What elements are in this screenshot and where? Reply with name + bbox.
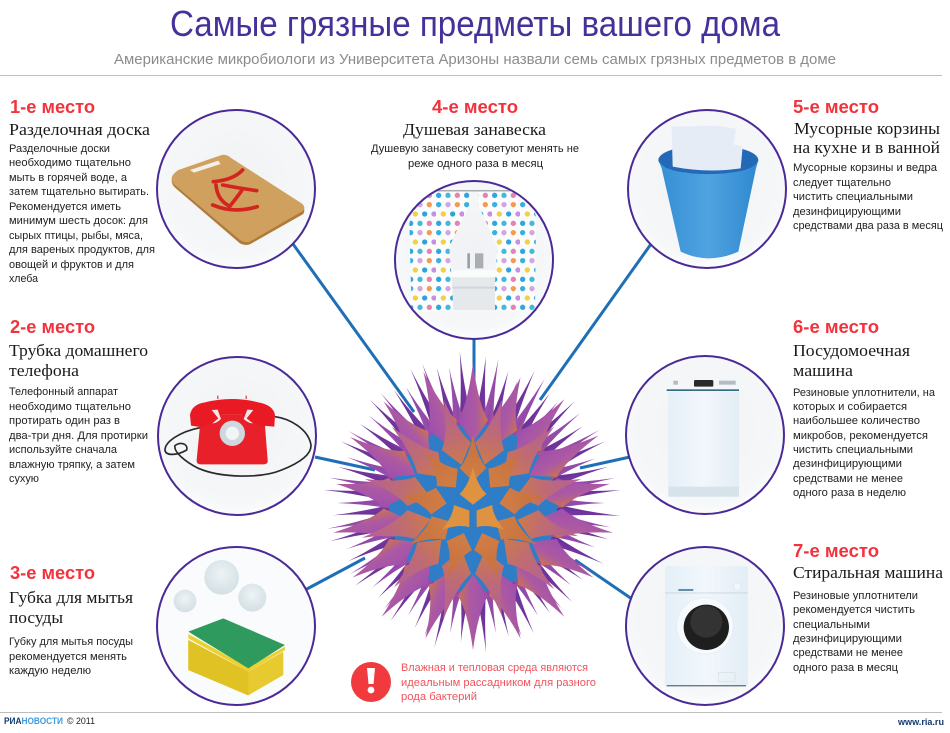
central bacterium (323, 351, 621, 653)
text: dishwasher (793, 387, 936, 499)
heading: phone (9, 341, 148, 380)
text: cutting board: минимум шесть досок: для (9, 215, 148, 227)
heading: dishwasher: Посудомоечная (793, 341, 910, 360)
text: trash bins: средствами два раза в месяц (793, 220, 944, 232)
rank 4: 4-е место (432, 96, 518, 117)
text: shower curtain (371, 143, 579, 170)
text: cutting board (9, 143, 155, 285)
text: shower curtain: Душевую занавеску советуют менять не (371, 143, 579, 155)
callout (351, 662, 596, 703)
text: cutting board: для вареных продуктов, для (9, 244, 155, 256)
callout text: идеальным рассадником для разного (401, 677, 596, 689)
text: washing machine: Резиновые уплотнители (793, 590, 918, 602)
text: phone: сухую (9, 473, 39, 485)
subtitle: Американские микробиологи из Университета Аризоны назвали семь самых грязных предметов в доме (114, 51, 836, 68)
inner spikes group (331, 363, 615, 650)
text: cutting board: затем тщательно вытирать. (9, 186, 149, 198)
text: sponge: Губку для мытья посуды (9, 636, 133, 648)
text: cutting board: необходимо тщательно (9, 157, 131, 169)
circle outline 2 (158, 357, 316, 515)
panel: item 7 (626, 540, 944, 705)
heading: trash bins: Мусорные корзины (794, 119, 940, 138)
icon: cutting board circle (158, 111, 314, 267)
text: trash bins (793, 162, 944, 232)
heading: phone: Трубка домашнего (9, 341, 148, 360)
spike ring middle (358, 396, 585, 623)
header rule (0, 75, 942, 76)
text: trash bins: чистить специальными (793, 191, 913, 203)
rank 3: 3-е место (10, 562, 95, 583)
circle outline 6 (626, 356, 784, 514)
title: Самые грязные предметы вашего дома (170, 3, 781, 44)
text: cutting board: мыть в горячей воде, а (9, 172, 128, 184)
text: washing machine (793, 590, 918, 674)
heading: washing machine: Стиральная машина (793, 563, 944, 582)
heading: trash bins (793, 119, 940, 157)
text: dishwasher: одного раза в неделю (793, 487, 906, 499)
text: cutting board: сырых птицы, рыбы, мяса, (9, 230, 143, 242)
text: cutting board: хлеба (9, 273, 39, 285)
text: dishwasher: Резиновые уплотнители, на (793, 387, 936, 399)
panel: item 1 (9, 96, 315, 285)
panel: item 3 (9, 547, 315, 705)
rank 5: 5-е место (793, 96, 879, 117)
text: trash bins: следует тщательно (793, 177, 891, 189)
circle outline 3 (157, 547, 315, 705)
text: cutting board: Рекомендуется иметь (9, 201, 121, 213)
text: sponge (9, 636, 133, 677)
icon: dishwasher (627, 357, 783, 513)
spike ring inner (399, 435, 547, 581)
panel: item 6 (626, 316, 936, 514)
heading: sponge: посуды (9, 608, 63, 627)
icon: red telephone (159, 358, 315, 514)
text: phone: Телефонный аппарат (9, 386, 118, 398)
back spikes dark (323, 351, 621, 653)
text: phone: два-три дня. Для протирки (9, 430, 148, 442)
text: washing machine: одного раза в месяц (793, 662, 899, 674)
callout text (401, 662, 596, 703)
text: phone (9, 386, 148, 485)
mid spikes purple (325, 357, 617, 643)
text: washing machine: дезинфицирующими (793, 633, 902, 645)
heading: sponge (9, 588, 133, 627)
rank 7: 7-е место (793, 540, 879, 561)
heading: dishwasher (793, 341, 910, 380)
heading: shower curtain: Душевая занавеска (403, 120, 547, 139)
text: dishwasher: дезинфицирующими (793, 458, 902, 470)
callout text: рода бактерий (401, 691, 477, 703)
blue body (389, 424, 557, 592)
text: phone: используйте сначала (9, 444, 118, 456)
text: phone: влажную тряпку, а затем (9, 459, 135, 471)
text: dishwasher: наибольшее количество (793, 415, 920, 427)
callout text: Влажная и тепловая среда являются (401, 662, 588, 674)
spike ring outer (331, 363, 615, 650)
circle outline 1 (157, 110, 315, 268)
text: washing machine: средствами не менее (793, 647, 903, 659)
circle outline 5 (628, 110, 786, 268)
text: dishwasher: которых и собирается (793, 401, 907, 413)
heading: sponge: Губка для мытья (9, 588, 133, 607)
text: shower curtain: реже одного раза в месяц (408, 158, 544, 170)
heading: cutting board: Разделочная доска (9, 120, 151, 139)
text: cutting board: Разделочные доски (9, 143, 110, 155)
text: phone: необходимо тщательно (9, 401, 131, 413)
rank 2: 2-е место (10, 316, 95, 337)
text: cutting board: овощей и фруктов и для (9, 259, 134, 271)
text: phone: протирать один раз в (9, 415, 120, 427)
circle outline 7 (626, 547, 784, 705)
text: trash bins: дезинфицирующими (793, 206, 901, 218)
heading: phone: телефона (9, 361, 80, 380)
heading: dishwasher: машина (793, 361, 854, 380)
heading: trash bins: на кухне и в ванной (793, 138, 940, 157)
icon: blue bin (629, 111, 785, 267)
panel: item 5 (628, 96, 944, 268)
icon: exclamation (351, 662, 391, 702)
text: washing machine: специальными (793, 619, 870, 631)
footer rule (0, 712, 942, 713)
rank 6: 6-е место (793, 316, 879, 337)
connector lines (293, 244, 651, 599)
text: dishwasher: средствами не менее (793, 473, 903, 485)
spike centre (434, 467, 512, 541)
icon: shower curtain (396, 182, 552, 338)
icon: sponge with bubbles (158, 548, 314, 704)
icon: washing machine (627, 548, 783, 704)
panel: item 2 (9, 316, 316, 515)
footer logo: РИАНОВОСТИ (4, 716, 63, 726)
footer url: www.ria.ru (897, 717, 944, 727)
text: trash bins: Мусорные корзины и ведра (793, 162, 938, 174)
text: washing machine: рекомендуется чистить (793, 604, 915, 616)
text: sponge: каждую неделю (9, 665, 91, 677)
panel: item 4 (371, 96, 579, 339)
footer copyright: © 2011 (67, 716, 95, 726)
circle outline 4 (395, 181, 553, 339)
rank 1: 1-е место (10, 96, 95, 117)
text: dishwasher: чистить специальными (793, 444, 913, 456)
text: sponge: рекомендуется менять (9, 651, 127, 663)
text: dishwasher: микробов, рекомендуется (793, 430, 928, 442)
